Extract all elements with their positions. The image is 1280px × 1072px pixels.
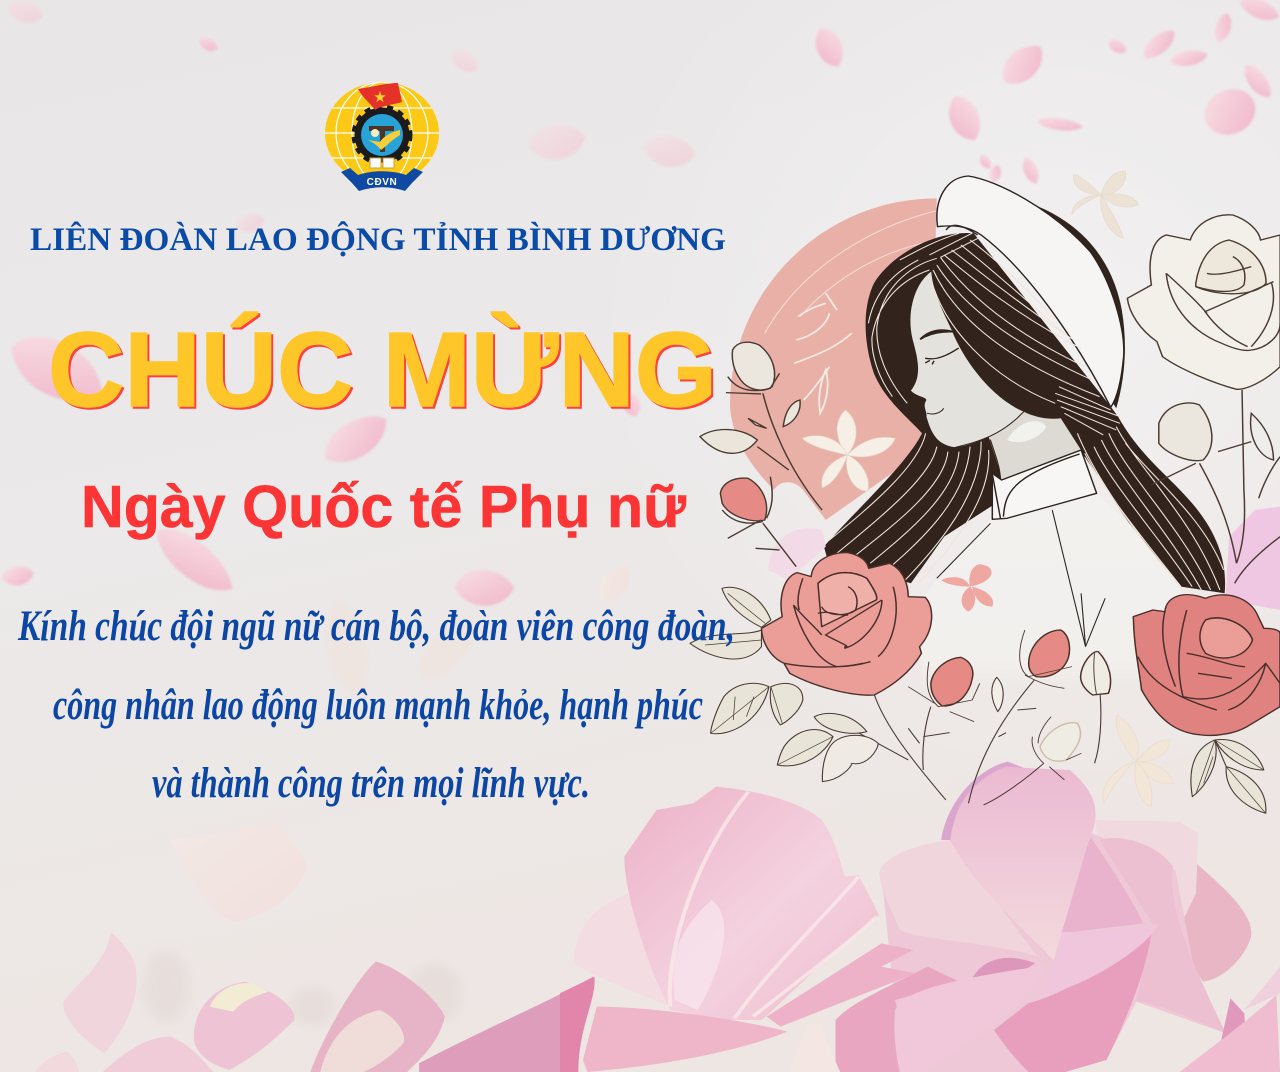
rosebuds bbox=[931, 657, 973, 706]
globe bbox=[325, 82, 439, 184]
organisation name: LIÊN ĐOÀN LAO ĐỘNG TỈNH BÌNH DƯƠNG bbox=[30, 220, 726, 258]
hat white top bbox=[937, 176, 1124, 407]
tip highlight petal bbox=[1038, 923, 1159, 997]
main petal bbox=[624, 787, 879, 1020]
lower left pale petal bbox=[894, 965, 1047, 1072]
white bud right bbox=[1159, 403, 1212, 461]
greeting message bbox=[17, 603, 735, 807]
greeting message: và thành công trên mọi lĩnh vực. bbox=[152, 760, 590, 807]
bottom left petals bbox=[36, 821, 594, 1072]
leaves bbox=[690, 587, 1266, 813]
title: Chúc mừng: CHÚC MỪNG bbox=[50, 313, 719, 431]
face bbox=[910, 272, 1024, 447]
curled petal bbox=[194, 982, 295, 1070]
pink sun disc bbox=[730, 198, 937, 520]
hair mass bbox=[824, 233, 1225, 593]
washes behind bouquet bbox=[768, 507, 1280, 610]
neck bbox=[955, 412, 1081, 480]
right lower petal bbox=[767, 943, 916, 1027]
white five-petal flower bbox=[802, 410, 895, 491]
greeting message: Kính chúc đội ngũ nữ cán bộ, đoàn viên công đoàn, bbox=[17, 603, 735, 650]
open book bbox=[370, 158, 394, 168]
bottom petal bbox=[583, 1007, 787, 1072]
small leaves bbox=[748, 400, 800, 428]
base fill bbox=[881, 833, 1226, 1072]
white centre petal bbox=[790, 1023, 840, 1072]
collar bbox=[992, 450, 1097, 519]
purple back edge bbox=[941, 762, 1038, 840]
petal shadows bbox=[142, 950, 463, 1027]
flower sketch in disc bbox=[794, 293, 852, 413]
leaf bbox=[700, 430, 757, 453]
figure: woman in ao dai with conical hat bbox=[730, 176, 1225, 690]
hammer bbox=[369, 126, 394, 152]
white rose bbox=[1127, 215, 1280, 389]
pale star flower bbox=[1103, 715, 1174, 807]
dark left petal bbox=[560, 977, 595, 1072]
back light petal bbox=[879, 840, 1038, 957]
red rose bbox=[1133, 595, 1280, 735]
greeting message: công nhân lao động luôn mạnh khỏe, hạnh phúc bbox=[53, 682, 703, 729]
top central petal bbox=[950, 767, 1096, 960]
long magenta petal bbox=[419, 977, 594, 1072]
lower pink petal bbox=[994, 927, 1152, 1072]
logo: Công đoàn Việt Nam bbox=[325, 82, 439, 191]
pale cream petal bbox=[170, 821, 307, 922]
blue wheel bbox=[361, 114, 403, 156]
bottom right petal flower bbox=[836, 762, 1280, 1072]
pale back petal bbox=[574, 893, 670, 1007]
mauve petal bbox=[310, 962, 445, 1072]
right mid petal bbox=[1054, 833, 1143, 960]
pale star flower top bbox=[1072, 171, 1138, 238]
leaf veins bbox=[705, 593, 1266, 813]
ribbon text: CĐVN bbox=[367, 177, 397, 188]
white bud left bbox=[732, 342, 775, 390]
hat dark brim bbox=[1014, 198, 1125, 408]
bottom left-center petal flower bbox=[560, 787, 916, 1072]
lower bouquet: roses, buds, leaves bbox=[690, 553, 1280, 813]
top bouquet: white rose and buds bbox=[700, 171, 1280, 583]
far right petals bbox=[1180, 863, 1251, 982]
ao dai body bbox=[918, 493, 1192, 690]
behind dark petal bbox=[836, 967, 960, 1072]
small pink petal bbox=[63, 932, 137, 1053]
eyebrow, eye, lips bbox=[920, 330, 1024, 478]
flag bbox=[358, 83, 402, 110]
petal streaks bbox=[670, 792, 877, 1018]
small purple petal bbox=[971, 958, 1035, 982]
subtitle: Ngày Quốc tế Phụ nữ bbox=[81, 474, 686, 540]
red bud upper bbox=[720, 478, 767, 521]
flag star: ★ bbox=[373, 88, 387, 106]
title: Chúc mừng: CHÚC MỪNG bbox=[48, 311, 717, 429]
hair strands bbox=[830, 233, 1224, 590]
scattered petals bbox=[0, 0, 1280, 702]
bottom fragments bbox=[36, 1052, 79, 1072]
ribbon bbox=[341, 168, 423, 191]
pink rose bbox=[761, 553, 932, 695]
butterfly flower on dress bbox=[941, 564, 993, 612]
stems bbox=[859, 680, 1226, 805]
bud sepals bbox=[908, 630, 1096, 780]
gear bbox=[358, 111, 406, 159]
far right bottom petals bbox=[1217, 998, 1249, 1072]
